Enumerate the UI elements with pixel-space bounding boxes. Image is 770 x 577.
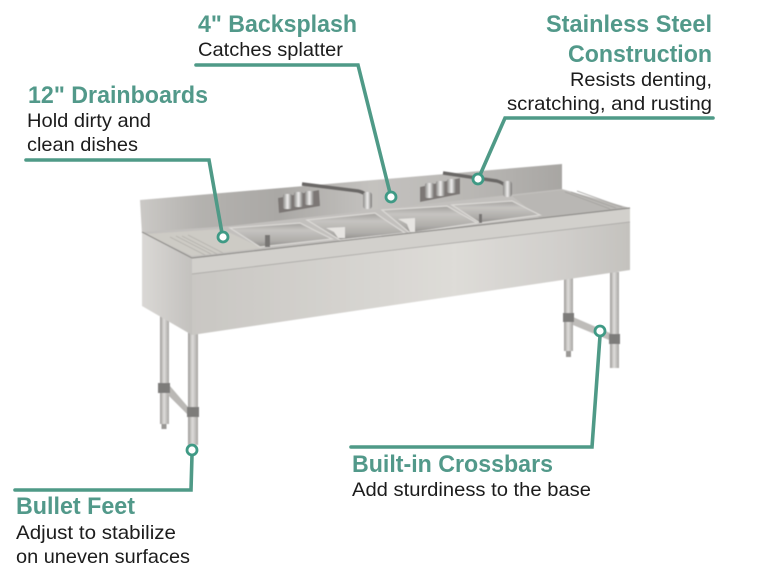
callout: bullet feet bbox=[15, 445, 197, 568]
front lip bbox=[192, 208, 630, 274]
marker bbox=[218, 232, 228, 242]
text: hold dirty and clean dishes: clean dishes bbox=[27, 134, 138, 156]
text: hold dirty and clean dishes: Hold dirty and bbox=[27, 110, 151, 132]
counter surface bbox=[142, 189, 630, 258]
backsplash bbox=[140, 164, 562, 234]
callout: stainless steel construction bbox=[473, 11, 713, 184]
marker bbox=[595, 326, 605, 336]
left drainboard bbox=[146, 229, 262, 256]
text: resists denting, scratching, and rusting: Resists denting, bbox=[570, 69, 712, 91]
heading: stainless steel construction: Stainless Steel bbox=[546, 11, 712, 38]
text: catches splatter: Catches splatter bbox=[198, 39, 344, 61]
text: resists denting, scratching, and rusting: scratching, and rusting bbox=[507, 93, 712, 115]
leader line bbox=[26, 160, 222, 233]
heading: built-in crossbars: Built-in Crossbars bbox=[352, 451, 553, 478]
callout: 4 inch backsplash bbox=[196, 11, 396, 202]
left legs bbox=[158, 312, 199, 445]
heading: 4 inch backsplash: 4" Backsplash bbox=[198, 11, 357, 38]
left side panel bbox=[142, 232, 192, 335]
right faucet bbox=[420, 173, 512, 202]
text: adjust to stabilize on uneven surfaces: on uneven surfaces bbox=[16, 546, 190, 568]
leader line bbox=[15, 455, 192, 490]
leader line bbox=[480, 118, 713, 175]
marker bbox=[386, 192, 396, 202]
leader line bbox=[351, 336, 600, 447]
sink basins bbox=[230, 201, 540, 247]
sink illustration bbox=[140, 164, 630, 445]
heading: stainless steel construction: Construction bbox=[568, 41, 712, 68]
left faucet bbox=[278, 184, 372, 213]
heading: 12 inch drainboards: 12" Drainboards bbox=[28, 82, 208, 109]
callout: built-in crossbars bbox=[351, 326, 605, 501]
marker bbox=[187, 445, 197, 455]
right legs bbox=[563, 272, 620, 368]
callout: 12 inch drainboards bbox=[26, 82, 228, 242]
leader line bbox=[196, 65, 390, 193]
front panel bbox=[192, 208, 630, 335]
text: adjust to stabilize on uneven surfaces: Adjust to stabilize bbox=[16, 522, 176, 544]
drain details bbox=[265, 214, 482, 247]
heading: bullet feet: Bullet Feet bbox=[16, 493, 135, 520]
text: add sturdiness to the base: Add sturdiness to the base bbox=[352, 479, 591, 501]
marker bbox=[473, 174, 483, 184]
right drainboard bbox=[512, 190, 628, 218]
